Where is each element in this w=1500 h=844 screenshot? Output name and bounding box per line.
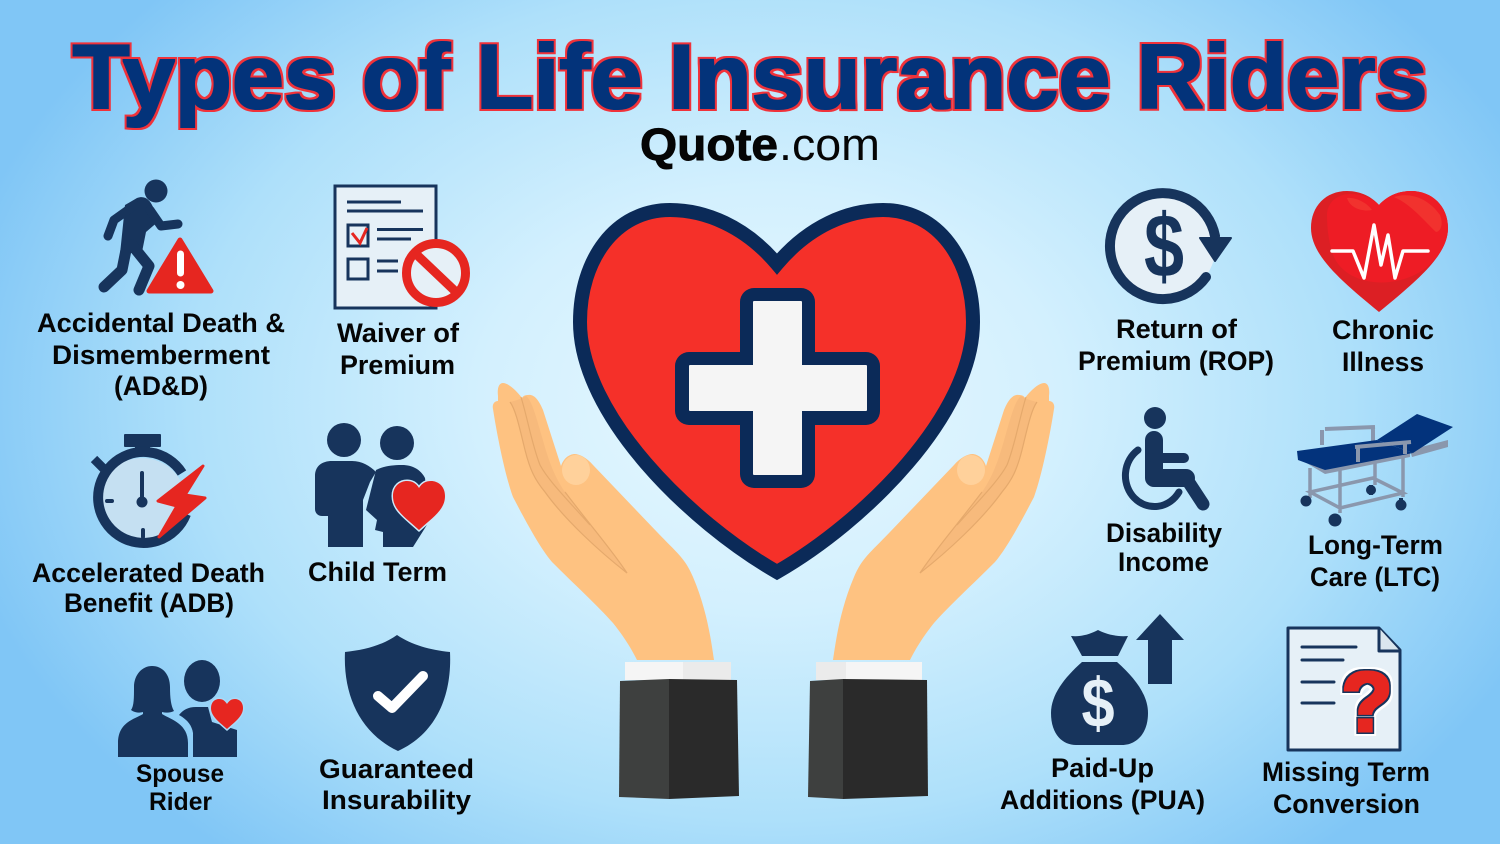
label: (AD&D) [114,371,208,401]
icon: large red heart with cross [580,210,973,572]
label [1262,757,1430,819]
label [1332,315,1434,377]
icon: money bag with up arrow [1051,614,1184,745]
label: Benefit (ADB) [64,588,234,618]
label: Accidental Death & [37,308,285,338]
label: Return of [1116,314,1238,344]
panel: Chronic Illness [1311,191,1448,377]
panel: Accidental Death & Dismemberment [37,180,285,401]
panel: Child Term [308,423,447,587]
label [337,318,460,380]
label: Chronic [1332,315,1434,345]
icon: left shirt cuff and sleeve [619,662,739,799]
label [32,558,265,618]
label [1078,314,1274,376]
icon: dollar with return arrow [1110,192,1231,299]
central illustration: heart held by hands [493,210,1054,799]
label: Rider [149,788,212,816]
logo: Quote.com: .com [779,119,880,170]
label [37,308,285,401]
panel: Waiver of Premium [335,186,466,380]
icon: checklist with prohibition sign [335,186,466,308]
panel: Guaranteed Insurability [319,635,474,815]
label: Premium (ROP) [1078,346,1274,376]
panel: Paid-Up Additions [1000,614,1205,815]
panel: Spouse Rider [118,660,243,816]
icon: shield with check mark [345,635,450,751]
label: Long-Term [1308,530,1443,560]
icon: stopwatch with lightning bolt [94,434,205,546]
icon: walking person with warning triangle [104,180,211,291]
icon: document with question mark [1288,628,1400,750]
icon: left hand [493,383,714,660]
icon: adult and child with heart [315,423,445,547]
label: Illness [1342,347,1424,377]
label: Disability [1106,518,1222,548]
label [319,754,474,815]
label: Child Term [308,557,447,587]
icon: money bag with up arrow: $ [1081,663,1115,742]
panel: Long-Term Care [1297,414,1453,592]
label: Missing Term [1262,757,1430,787]
label: Paid-Up [1051,753,1154,783]
label: Care (LTC) [1310,562,1440,592]
label: Insurability [322,785,471,815]
panel: Return of Premium [1078,192,1274,376]
icon: wheelchair user [1125,407,1203,507]
icon: couple with heart [118,660,243,757]
label [136,760,224,816]
logo: Quote.com: Quote [640,119,778,170]
label [1000,753,1205,815]
label: Accelerated Death [32,558,265,588]
icon: red heart with pulse line [1311,191,1448,312]
icon: document with question mark: ? [1341,655,1393,749]
title: Types of Life Insurance Riders [72,27,1428,128]
label: Guaranteed [319,754,474,784]
label: Income [1118,547,1209,577]
label: Conversion [1273,789,1420,819]
label: Dismemberment [52,340,270,370]
icon: right shirt cuff and sleeve [808,662,928,799]
icon: right hand [833,383,1054,660]
label: Additions (PUA) [1000,785,1205,815]
icon: dollar with return arrow: $ [1144,196,1184,297]
label: Premium [340,350,455,380]
label: Waiver of [337,318,460,348]
label: Spouse [136,760,224,788]
panel: Disability Income [1106,407,1222,577]
panel: Accelerated Death Benefit [32,434,265,618]
label [1106,518,1222,577]
panel: Missing Term Conversion [1262,628,1430,819]
icon: hospital bed [1297,414,1453,526]
label [1308,530,1443,592]
